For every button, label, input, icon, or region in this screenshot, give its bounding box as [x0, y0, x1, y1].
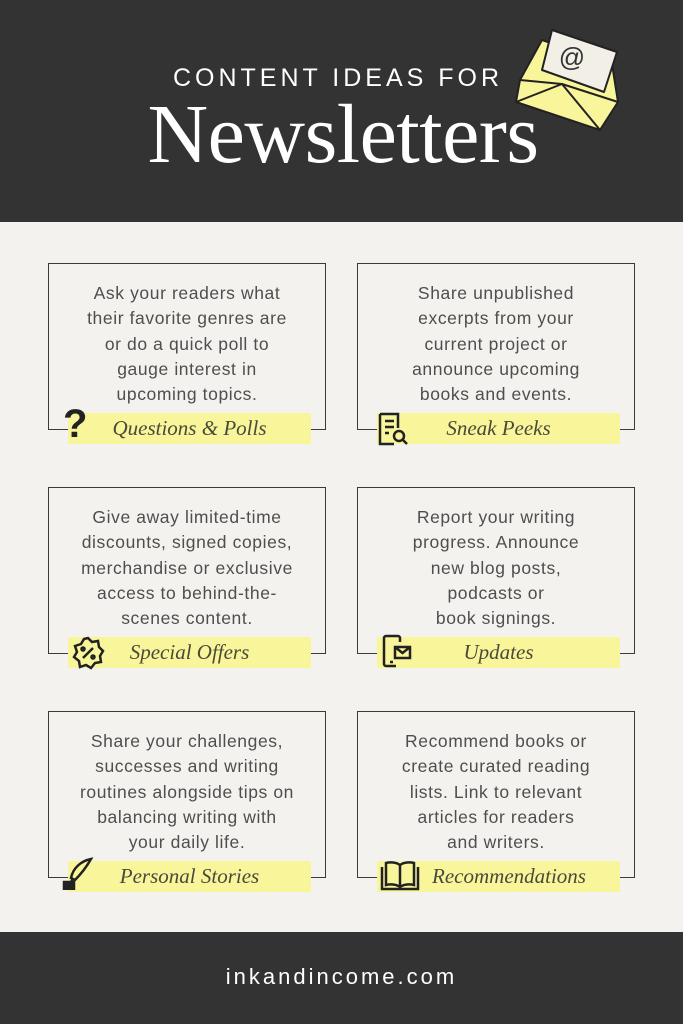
- panel: sneak peeks: Share unpublished: [418, 283, 574, 303]
- panel: questions & polls: upcoming topics.: [117, 384, 257, 404]
- panel: personal stories: your daily life.: [129, 832, 245, 852]
- icon: envelope: [515, 29, 619, 131]
- footer: [0, 932, 683, 1024]
- panel: personal stories: routines alongside tips on: [80, 782, 294, 802]
- panel: recommendations: lists. Link to relevant: [410, 782, 582, 802]
- label: sneak peeks: Sneak Peeks: [446, 416, 551, 440]
- panel: sneak peeks: books and events.: [420, 384, 572, 404]
- panel: questions & polls: gauge interest in: [117, 359, 257, 379]
- icon: open book: [380, 861, 420, 890]
- panel: updates: Report your writing: [417, 507, 575, 527]
- panel: recommendations: create curated reading: [402, 756, 590, 776]
- panel: recommendations: Recommend books or: [405, 731, 587, 751]
- icon: envelope: @: [559, 42, 585, 72]
- panel: questions & polls: [48, 263, 326, 430]
- panel: sneak peeks: announce upcoming: [412, 359, 580, 379]
- panel: recommendations: articles for readers: [418, 807, 574, 827]
- label: updates: [377, 637, 620, 668]
- panel: sneak peeks: current project or: [424, 334, 568, 354]
- panel: updates: [357, 487, 635, 654]
- panel: personal stories: balancing writing with: [97, 807, 277, 827]
- subtitle: CONTENT IDEAS FOR: [173, 64, 503, 92]
- label: special offers: Special Offers: [130, 640, 249, 664]
- footer url: inkandincome.com: [226, 964, 457, 989]
- title: Newsletters: [147, 88, 539, 181]
- panel: recommendations: [357, 711, 635, 878]
- icon: phone mail: [382, 634, 412, 668]
- panel: special offers: scenes content.: [121, 608, 253, 628]
- label: questions & polls: [68, 413, 311, 444]
- label: updates: Updates: [464, 640, 534, 664]
- panel: special offers: merchandise or exclusive: [81, 558, 293, 578]
- panel: sneak peeks: [357, 263, 635, 430]
- panel: updates: new blog posts,: [431, 558, 561, 578]
- icon: quill ink: [62, 857, 94, 890]
- panel: updates: book signings.: [436, 608, 556, 628]
- panel: updates: podcasts or: [447, 583, 545, 603]
- label: questions & polls: Questions & Polls: [112, 416, 266, 440]
- header: [0, 0, 683, 222]
- panel: sneak peeks: excerpts from your: [418, 308, 574, 328]
- panel: updates: progress. Announce: [413, 532, 579, 552]
- panel: special offers: [48, 487, 326, 654]
- label: sneak peeks: [377, 413, 620, 444]
- label: recommendations: [377, 861, 620, 892]
- panel: questions & polls: Ask your readers what: [94, 283, 280, 303]
- panel: recommendations: and writers.: [447, 832, 545, 852]
- icon: document search: [378, 412, 408, 446]
- label: recommendations: Recommendations: [432, 864, 586, 888]
- icon: discount badge: [72, 636, 104, 670]
- panel: special offers: discounts, signed copies,: [82, 532, 292, 552]
- panel: personal stories: [48, 711, 326, 878]
- panel: questions & polls: or do a quick poll to: [105, 334, 269, 354]
- panel: personal stories: Share your challenges,: [91, 731, 283, 751]
- panel: special offers: Give away limited-time: [92, 507, 282, 527]
- label: personal stories: Personal Stories: [120, 864, 259, 888]
- label: special offers: [68, 637, 311, 668]
- label: personal stories: [68, 861, 311, 892]
- panel: personal stories: successes and writing: [95, 756, 279, 776]
- panel: questions & polls: their favorite genres are: [87, 308, 287, 328]
- icon: question mark: ?: [63, 402, 87, 446]
- panel: special offers: access to behind-the-: [97, 583, 277, 603]
